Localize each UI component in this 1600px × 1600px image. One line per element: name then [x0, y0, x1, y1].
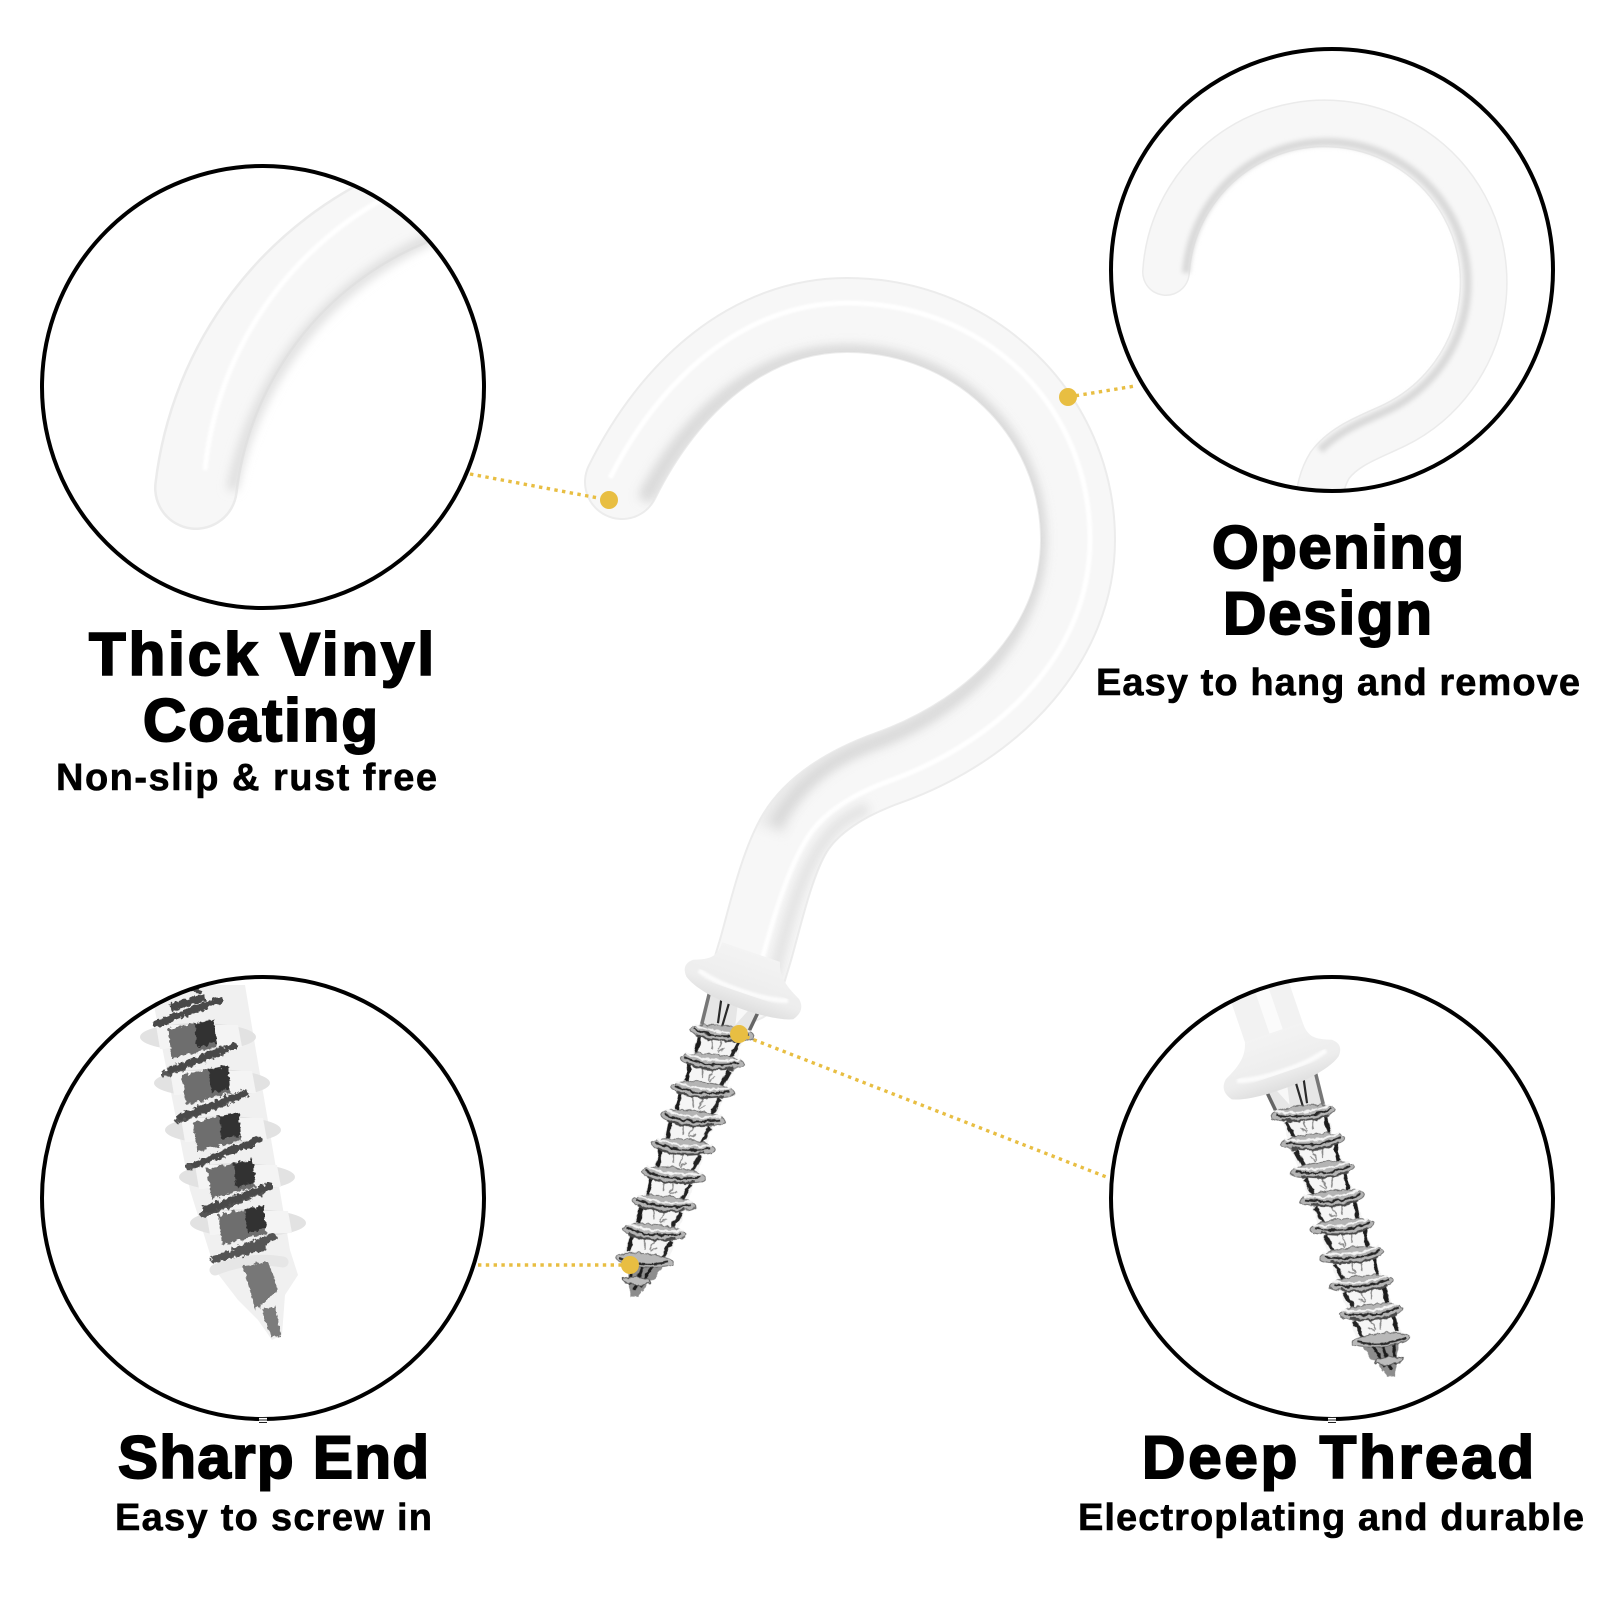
callout: thick vinyl coating	[42, 166, 618, 799]
detail circle: hook tip	[42, 166, 484, 608]
white vinyl hook body	[610, 303, 1090, 985]
small handle mark	[259, 1417, 267, 1423]
detail circle: screw thread	[1111, 924, 1553, 1423]
heading: Coating	[143, 687, 378, 754]
detail circle: hook opening	[1111, 49, 1553, 505]
heading: Sharp End	[118, 1424, 429, 1491]
heading: Thick Vinyl	[89, 621, 434, 688]
caption: Electroplating and durable	[1078, 1497, 1584, 1539]
leader line	[1059, 386, 1135, 406]
small handle mark	[1328, 1417, 1336, 1423]
leader line	[470, 474, 618, 509]
caption: Easy to hang and remove	[1096, 662, 1580, 704]
callout: sharp end	[42, 975, 639, 1539]
caption: Non-slip & rust free	[56, 757, 437, 799]
callout: deep thread	[730, 924, 1584, 1539]
detail circle: screw tip	[42, 975, 484, 1423]
callout: opening design	[1059, 49, 1580, 704]
threaded screw with collar	[579, 933, 813, 1319]
heading	[1212, 514, 1464, 647]
caption: Easy to screw in	[115, 1497, 432, 1539]
heading: Deep Thread	[1142, 1424, 1534, 1491]
heading: Opening	[1212, 514, 1464, 581]
leader line	[730, 1025, 1109, 1178]
leader line	[478, 1256, 639, 1274]
heading: Design	[1223, 580, 1432, 647]
hook illustration: main white hook with screw	[579, 303, 1090, 1319]
heading	[89, 621, 434, 754]
